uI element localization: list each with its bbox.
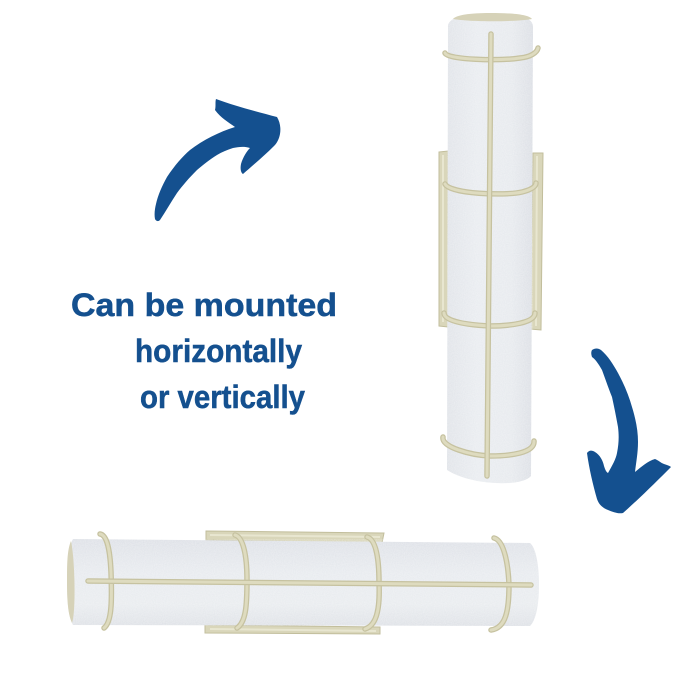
rings: horizontal [100,534,509,630]
mounting plate: vertical [439,151,543,330]
center rod: horizontal [88,581,531,585]
heading: mounting text [71,287,337,415]
arrow: curved down [587,348,671,513]
heading: mounting text: or vertically [140,379,305,415]
diffuser: vertical [447,13,533,483]
center rod: vertical [487,34,491,476]
horizontal lamp [67,531,539,634]
heading: mounting text: horizontally [135,333,302,369]
vertical lamp [439,13,543,483]
heading: mounting text: Can be mounted [71,287,337,323]
diffuser: horizontal [67,539,539,626]
arrow: curved up-right [155,99,280,221]
mounting plate: horizontal [205,531,384,634]
rings: vertical [443,48,538,456]
